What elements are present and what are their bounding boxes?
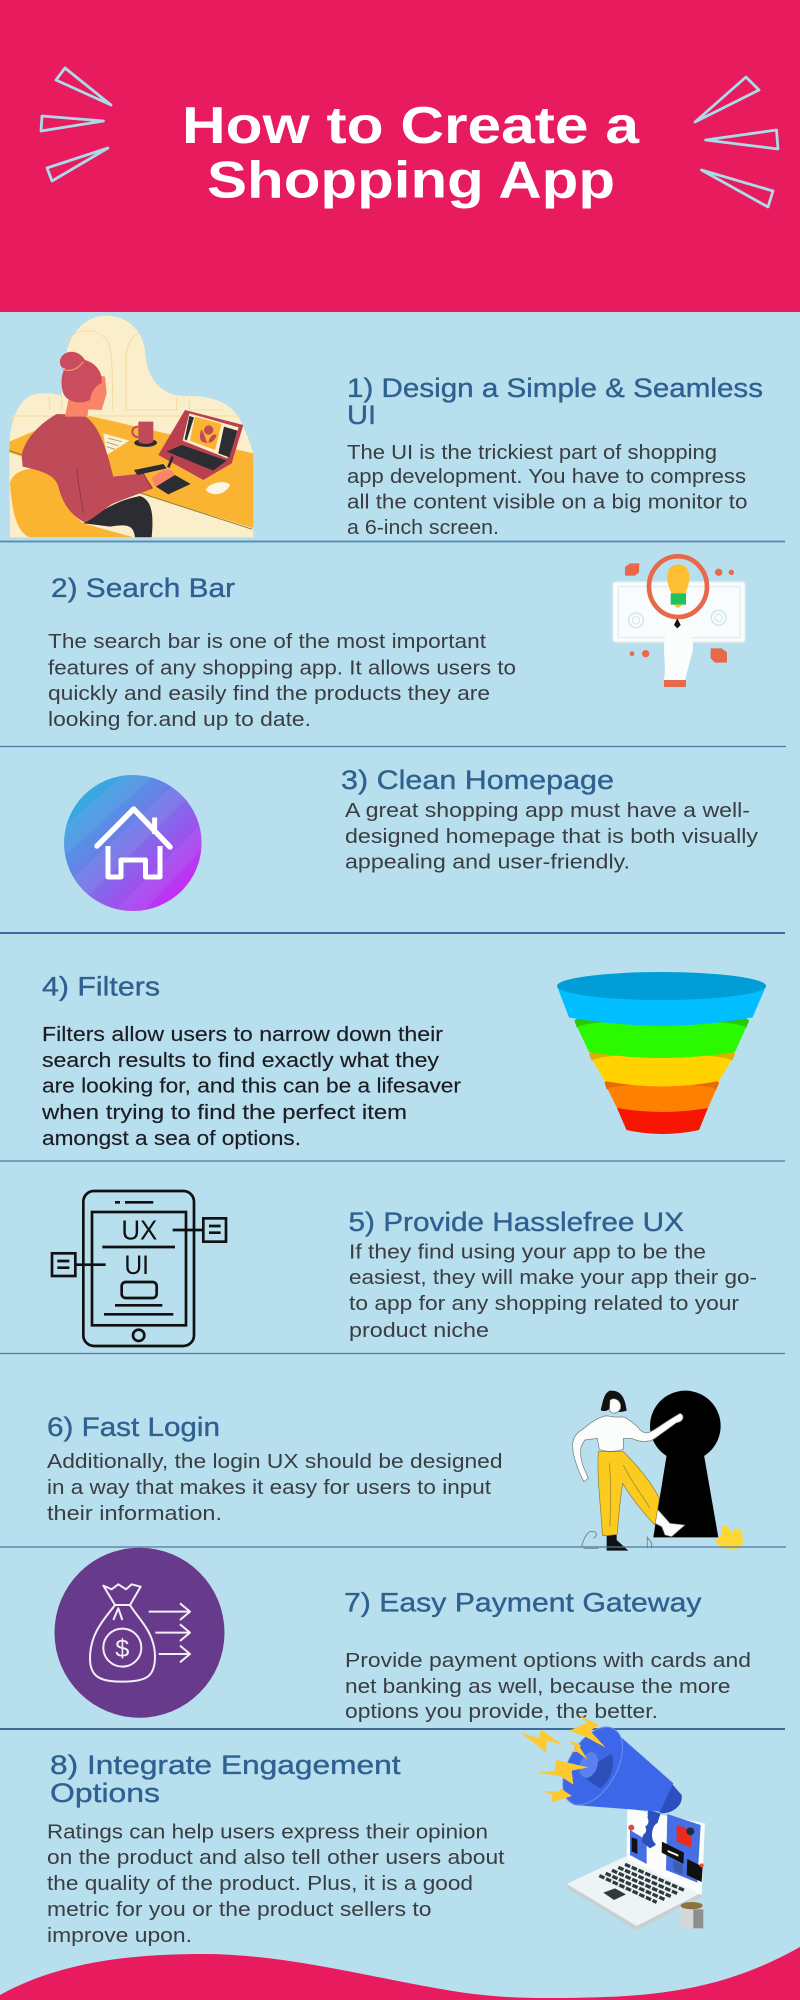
body text: search results to find exactly what they	[42, 1049, 440, 1072]
heading: 3) Clean Homepage	[341, 765, 614, 795]
body text: to app for any shopping related to your	[349, 1292, 739, 1315]
body text: looking for.and up to date.	[48, 708, 311, 731]
heading: Options	[50, 1778, 160, 1808]
body text: metric for you or the product sellers to	[47, 1898, 432, 1921]
body text: features of any shopping app. It allows users to	[48, 656, 516, 680]
heading: 1) Design a Simple & Seamless	[347, 373, 763, 403]
body text	[41, 1023, 461, 1150]
body text: in a way that makes it easy for users to input	[47, 1476, 491, 1499]
illustration: woman designing at laptop	[9, 316, 253, 537]
body text: Provide payment options with cards and	[345, 1649, 751, 1672]
section 2: search bar	[48, 556, 745, 731]
heading: 6) Fast Login	[47, 1412, 220, 1442]
body text: The UI is the trickiest part of shopping	[347, 441, 717, 464]
icon: left burst triangles	[41, 68, 111, 181]
icon: UX UI tablet: UX	[121, 1214, 158, 1245]
body text: all the content visible on a big monitor to	[347, 490, 748, 514]
heading: 4) Filters	[42, 972, 160, 1002]
heading: 7) Easy Payment Gateway	[344, 1588, 702, 1618]
illustration: megaphone and laptop	[520, 1715, 705, 1931]
icon: UX UI tablet: UI	[124, 1250, 149, 1280]
icon: right burst triangles	[695, 77, 778, 207]
body text	[347, 441, 748, 539]
section 8: engagement options	[47, 1715, 705, 1947]
icon: UX UI tablet	[52, 1191, 226, 1346]
heading: UI	[347, 400, 376, 430]
icon: money bag with arrows	[54, 1548, 224, 1718]
section 6: fast login	[47, 1391, 744, 1551]
body text: appealing and user-friendly.	[345, 850, 630, 874]
heading: 8) Integrate Engagement	[50, 1750, 401, 1780]
body text: quickly and easily find the products they are	[48, 682, 490, 705]
body text	[47, 1450, 502, 1525]
body text: designed homepage that is both visually	[345, 825, 759, 848]
section 5: hasslefree UX	[52, 1191, 757, 1346]
funnel chart	[557, 972, 766, 1134]
body text: Ratings can help users express their opinion	[47, 1820, 488, 1844]
bottom wave	[0, 1947, 800, 2000]
body text: when trying to find the perfect item	[41, 1101, 407, 1124]
body text	[48, 630, 516, 731]
body text: easiest, they will make your app their go-	[349, 1266, 757, 1289]
heading: 2) Search Bar	[51, 573, 235, 603]
heading: 5) Provide Hasslefree UX	[348, 1207, 684, 1237]
body text: product niche	[349, 1319, 489, 1342]
body text: improve upon.	[47, 1924, 192, 1947]
body text: The search bar is one of the most important	[48, 630, 486, 653]
section 4: filters	[41, 972, 766, 1150]
section 1: simple UI	[9, 316, 763, 539]
body text: the quality of the product. Plus, it is a good	[47, 1872, 473, 1895]
icon: magnifier over light bulb	[613, 556, 745, 687]
body text	[47, 1820, 505, 1947]
illustration: woman at keyhole	[573, 1391, 744, 1551]
body text: their information.	[47, 1502, 222, 1525]
body text: app development. You have to compress	[347, 465, 746, 488]
body text: options you provide, the better.	[345, 1700, 658, 1723]
body text: amongst a sea of options.	[42, 1127, 301, 1150]
body text	[345, 1649, 751, 1723]
title: How to Create a	[182, 97, 640, 155]
title	[182, 97, 640, 210]
icon: money bag with arrows: $	[115, 1635, 129, 1663]
body text: A great shopping app must have a well-	[345, 799, 750, 822]
body text: are looking for, and this can be a lifesaver	[42, 1074, 461, 1098]
icon: house in gradient circle	[64, 775, 202, 911]
heading	[347, 373, 763, 430]
body text	[345, 799, 759, 874]
body text: If they find using your app to be the	[349, 1240, 706, 1264]
body text: net banking as well, because the more	[345, 1675, 730, 1698]
body text	[349, 1240, 757, 1342]
header banner	[0, 0, 800, 312]
body text: a 6-inch screen.	[347, 516, 499, 539]
heading	[50, 1750, 401, 1808]
title: Shopping App	[207, 152, 615, 210]
section 3: clean homepage	[60, 765, 759, 915]
body text: on the product and also tell other users about	[47, 1846, 505, 1869]
section 7: payment gateway	[54, 1548, 751, 1723]
body text: Filters allow users to narrow down their	[42, 1023, 443, 1046]
body text: Additionally, the login UX should be designed	[47, 1450, 502, 1473]
